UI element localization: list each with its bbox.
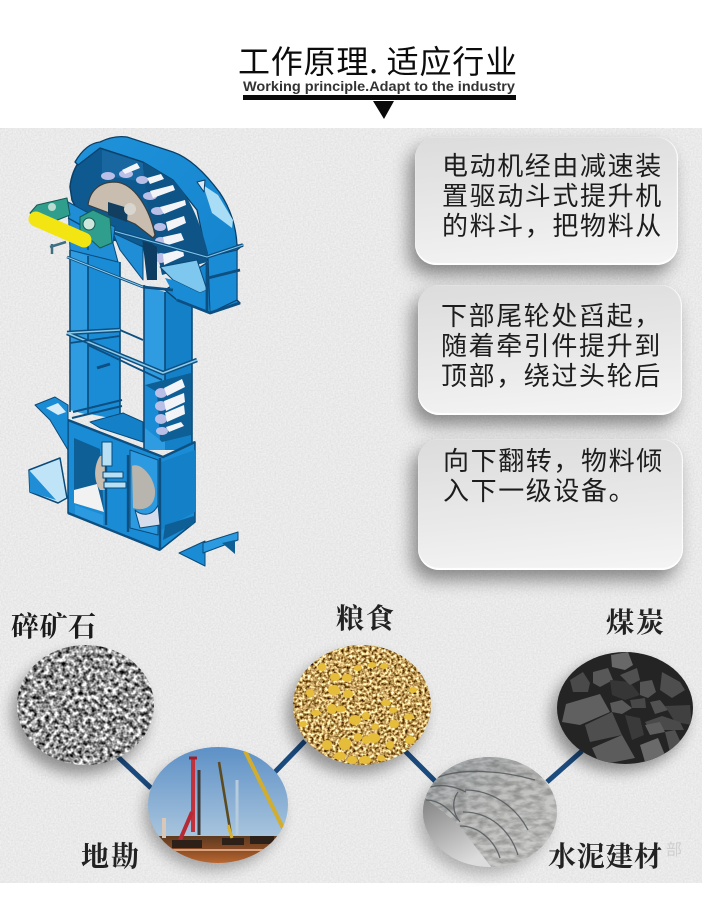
label: survey: 地勘	[81, 835, 139, 875]
title rule	[243, 95, 516, 100]
card 3 text	[443, 446, 664, 506]
chinese title: 工作原理. 适应行业	[238, 37, 517, 83]
right leg	[144, 285, 192, 450]
card 3 text: 向下翻转，物料倾	[443, 446, 664, 476]
left leg upper	[70, 250, 120, 420]
drive platform	[68, 202, 118, 262]
back wall lighter segment	[102, 150, 144, 182]
outlet foot piece	[179, 532, 238, 566]
card 1 text	[442, 151, 663, 241]
label: cement and building materials: 水泥建材	[548, 835, 662, 875]
head wheel	[88, 182, 155, 238]
circle: cement	[418, 755, 560, 874]
circle: crushed ore	[12, 643, 157, 774]
shaft block	[108, 202, 136, 222]
text card 3	[418, 439, 683, 570]
gearbox green	[30, 198, 112, 248]
title heading	[238, 37, 517, 119]
head casing back wall	[70, 142, 160, 250]
card 1 text: 的料斗，把物料从	[442, 211, 663, 241]
mid bracing frame	[67, 330, 197, 418]
head chute and frame	[67, 230, 243, 313]
yellow motor	[36, 219, 84, 240]
inlet hopper	[35, 397, 68, 450]
casing light facet	[203, 185, 233, 228]
head buckets	[101, 163, 186, 265]
label: crushed ore: 碎矿石	[11, 605, 96, 645]
casing inner dark	[143, 162, 208, 275]
label: grain: 粮食	[336, 597, 394, 637]
connector lines	[118, 741, 582, 788]
lower buckets in leg	[155, 379, 185, 435]
english subtitle: Working principle.Adapt to the industry	[243, 78, 515, 94]
label: coal: 煤炭	[605, 601, 664, 641]
lower leg base platform	[90, 413, 143, 442]
top background panel	[0, 128, 702, 598]
motor bracket	[50, 242, 66, 254]
down arrow	[373, 101, 394, 119]
circle: coal	[551, 650, 697, 772]
card 2 text: 随着牵引件提升到	[441, 331, 662, 361]
text card 2	[418, 285, 682, 415]
circle: drilling rig	[144, 747, 288, 870]
text card 1	[415, 137, 678, 265]
card 1 text: 置驱动斗式提升机	[442, 181, 663, 211]
card 2 text: 顶部，绕过头轮后	[441, 361, 662, 391]
card 1 text: 电动机经由减速装	[442, 151, 663, 181]
circle: grain	[287, 643, 435, 774]
inspection door panel	[29, 458, 67, 503]
head casing shell	[75, 137, 243, 313]
watermark: 部	[666, 836, 682, 860]
bottom background panel	[0, 598, 702, 883]
card 2 text: 下部尾轮处舀起，	[441, 301, 662, 331]
card 3 text: 入下一级设备。	[443, 476, 636, 506]
lower boot box	[68, 420, 195, 550]
bucket elevator illustration	[29, 137, 243, 566]
casing vent	[197, 180, 205, 192]
head box front face	[208, 250, 237, 313]
card 2 text	[441, 301, 662, 391]
